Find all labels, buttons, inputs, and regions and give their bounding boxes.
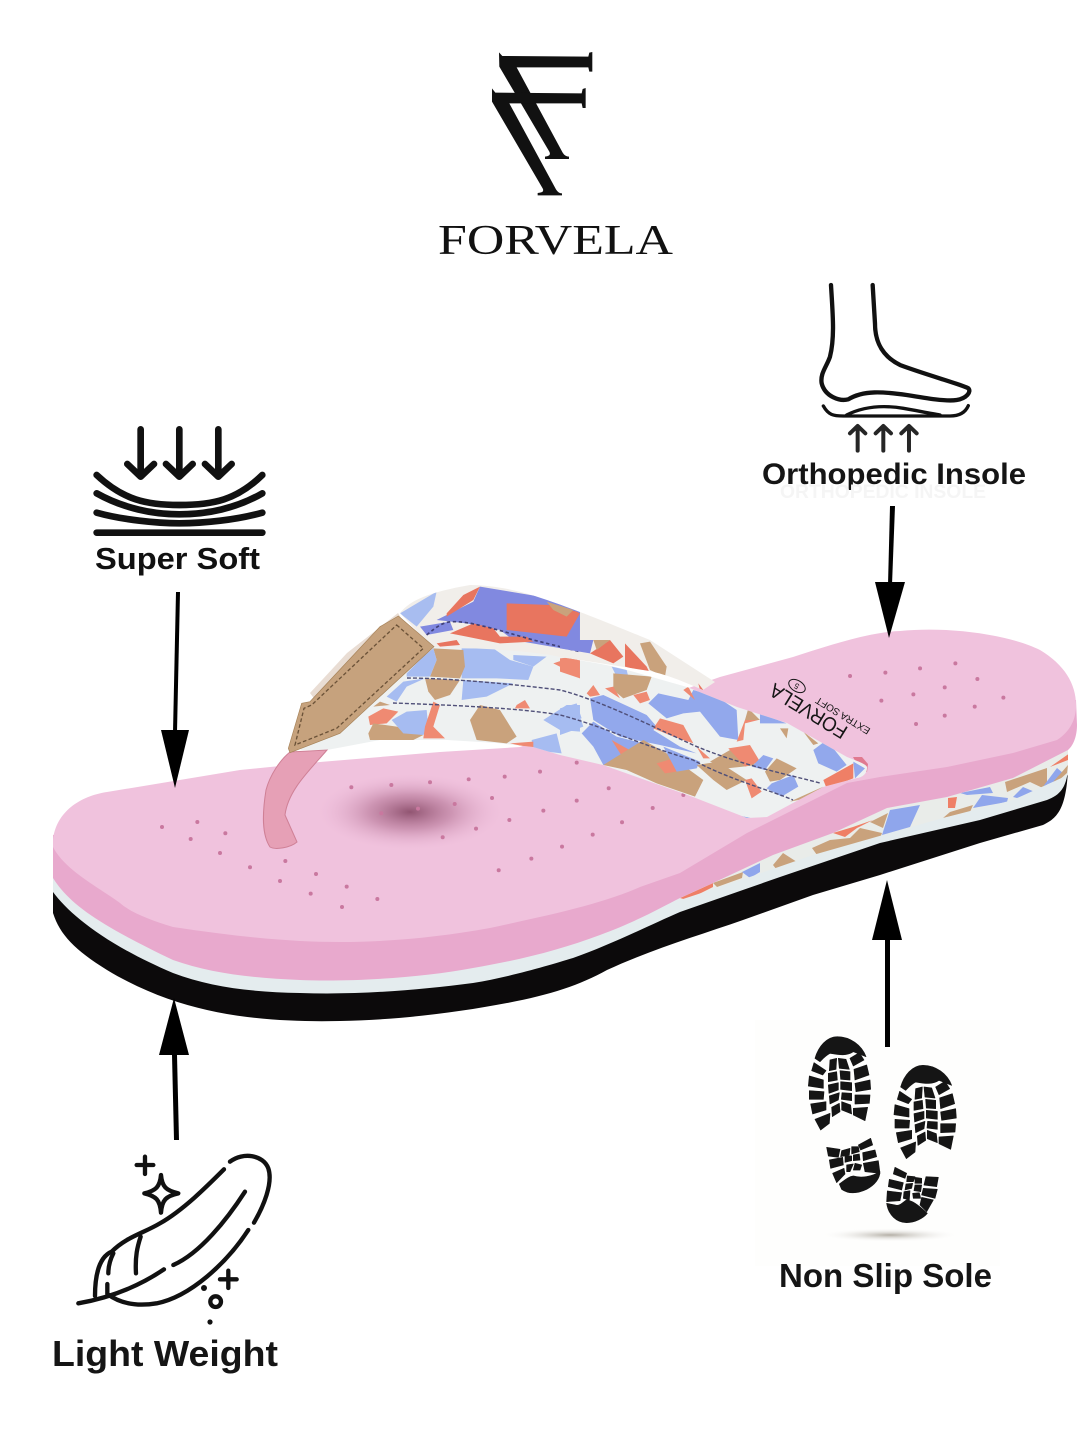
arrow: Non Slip Sole to outsole: [872, 880, 902, 1047]
heel print left: [827, 1138, 880, 1193]
arrow: Orthopedic Insole to footbed: [875, 506, 905, 638]
feature: Non Slip Sole: [755, 1020, 1000, 1294]
arrow: Super Soft to footbed: [161, 592, 189, 788]
sole: black base: [53, 770, 1068, 1021]
footbed: perforation holes: [160, 661, 1005, 909]
icon: soft cushion: [97, 429, 262, 533]
strap: front band: [300, 648, 868, 818]
icon: footprints: [808, 1037, 956, 1223]
thong post: [263, 750, 327, 848]
strap sliver behind toe patch: [310, 613, 415, 720]
label: Light Weight: [52, 1333, 278, 1374]
tan toe patch: [288, 616, 434, 753]
strap: back band: [400, 585, 715, 690]
floor shadow: [820, 1228, 960, 1242]
footbed brand print: FORVELA: [765, 678, 852, 742]
heel print right: [887, 1167, 938, 1223]
logo: Forvela monogram and wordmark: [438, 52, 674, 264]
icon: foot on insole: [821, 285, 969, 451]
strap tip shadow: [853, 757, 868, 772]
footbed: pink top surface: [53, 630, 1076, 942]
icon: feather dots: [201, 1285, 213, 1325]
footbed: pink side wall: [53, 700, 1077, 980]
feature: Orthopedic Insole: [762, 285, 1026, 503]
footbed brand print: 5: [792, 681, 801, 691]
label: Super Soft: [95, 541, 260, 576]
ghost label reflection: ORTHOPEDIC INSOLE: [780, 482, 986, 503]
label: Non Slip Sole: [779, 1257, 992, 1294]
sole: marbled wedge: [680, 754, 1068, 899]
sole print left: [808, 1037, 871, 1130]
label: Orthopedic Insole: [762, 458, 1026, 491]
footbed brand print: EXTRA SOFT: [814, 694, 873, 736]
arrow: Light Weight to sole: [159, 998, 189, 1140]
icon: double F monogram: [492, 52, 592, 195]
footbed: strap shadow: [318, 774, 502, 850]
icon: feather: [78, 1156, 270, 1307]
panel: faint backdrop: [755, 1020, 1000, 1266]
feature: Super Soft: [95, 429, 262, 576]
strap stitching: [407, 678, 820, 783]
feature: Light Weight: [52, 1156, 278, 1374]
flip flop product illustration: [53, 580, 1080, 1021]
wordmark: FORVELA: [438, 218, 674, 264]
sole print right: [894, 1065, 956, 1159]
sole: white layer: [53, 750, 1068, 993]
